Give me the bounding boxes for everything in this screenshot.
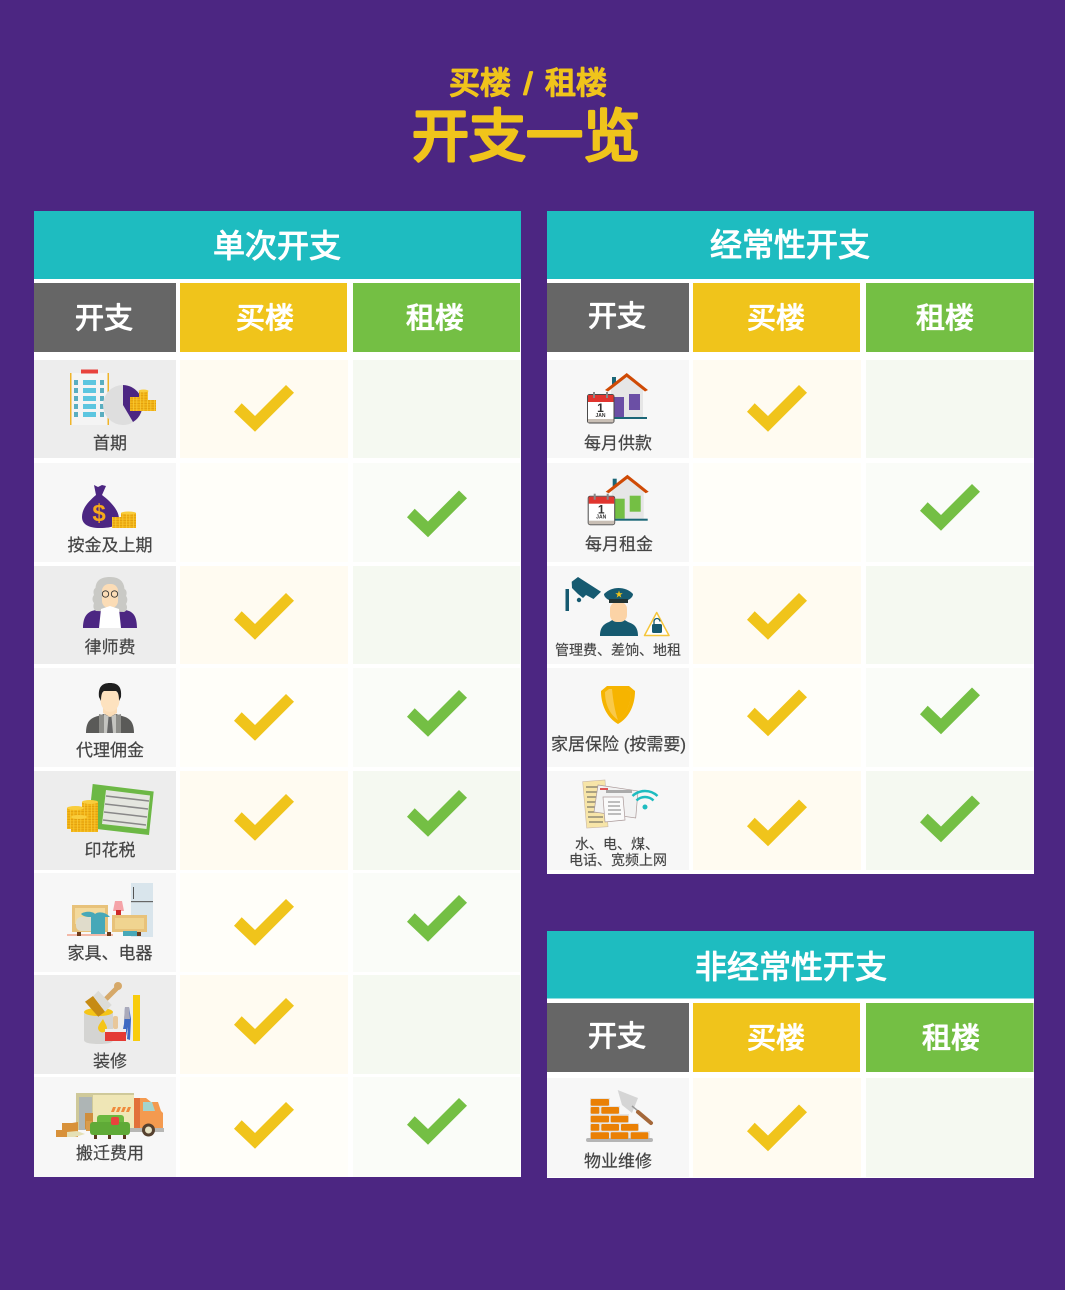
- tick: [234, 998, 294, 1045]
- tick: [920, 484, 980, 531]
- icon: money bag: [82, 485, 136, 528]
- subtitle: 买楼: [449, 66, 511, 101]
- icon: house and calendar: JAN: [596, 515, 607, 521]
- row: furniture: [34, 873, 520, 972]
- label: 管理费、差饷、地租: [555, 642, 681, 658]
- icon: guard, camera and lock: [566, 577, 669, 636]
- tick: [407, 1098, 467, 1145]
- row: moving costs: [34, 1077, 520, 1177]
- column headers: [34, 283, 520, 352]
- tick: [234, 385, 294, 432]
- tick: [234, 1102, 294, 1149]
- icon: stamp document and coins: [67, 784, 154, 835]
- tick: [747, 800, 807, 846]
- tick: [407, 895, 467, 942]
- panel: recurring costs: [547, 211, 1034, 874]
- heading: one-off costs: [34, 211, 521, 279]
- heading: non-recurring costs: [547, 931, 1034, 998]
- label: 水、电、煤、: [575, 836, 659, 852]
- row: management fee: [547, 566, 1034, 664]
- tick: [747, 690, 807, 736]
- label: 家居保险 (按需要): [551, 735, 686, 754]
- heading: one-off costs: 单次开支: [213, 228, 341, 264]
- panel: one-off costs: [34, 211, 521, 1177]
- tick: [920, 688, 980, 734]
- tick: [747, 593, 807, 640]
- label: 电话、宽频上网: [569, 852, 667, 868]
- label: 每月租金: [585, 535, 653, 554]
- icon: house and calendar: 1: [597, 401, 604, 415]
- row: deposit: [34, 463, 520, 562]
- icon: building and pie: [70, 370, 156, 425]
- label: 搬迁费用: [76, 1144, 144, 1163]
- icon: house and calendar: [588, 373, 648, 423]
- icon: paint and tools: [84, 982, 140, 1044]
- label: 按金及上期: [68, 536, 152, 555]
- panel: non-recurring costs: [547, 931, 1034, 1178]
- label: 首期: [93, 434, 127, 453]
- icon: bricks and trowel: [586, 1090, 653, 1142]
- column headers: 买楼: [747, 302, 805, 335]
- tick: [747, 385, 807, 432]
- icon: bills and wifi: [583, 780, 658, 828]
- column headers: [547, 283, 1034, 352]
- heading: recurring costs: 经常性开支: [710, 227, 870, 263]
- tick: [407, 490, 467, 537]
- row: stamp duty: [34, 771, 520, 870]
- icon: house and calendar: 1: [598, 503, 605, 517]
- heading: non-recurring costs: 非经常性开支: [695, 949, 887, 985]
- tick: [407, 690, 467, 737]
- label: 家具、电器: [68, 944, 152, 963]
- tick: [407, 790, 467, 837]
- row: monthly mortgage: [547, 360, 1034, 458]
- column headers: 买楼: [747, 1022, 805, 1055]
- row: utilities: [547, 771, 1034, 870]
- icon: judge: [83, 577, 137, 628]
- row: property repairs: [547, 1078, 1034, 1177]
- column headers: 租楼: [922, 1022, 980, 1055]
- label: 代理佣金: [76, 741, 144, 760]
- tick: [234, 794, 294, 841]
- column headers: 开支: [75, 302, 133, 335]
- title: [412, 66, 640, 169]
- row: legal fee: [34, 566, 520, 664]
- label: [569, 836, 667, 868]
- subtitle: [449, 66, 607, 101]
- tick: [234, 899, 294, 946]
- column headers: 租楼: [406, 302, 464, 335]
- column headers: [547, 1003, 1034, 1072]
- column headers: 买楼: [236, 302, 294, 335]
- column headers: 开支: [588, 300, 646, 333]
- row: monthly rent: [547, 463, 1034, 562]
- icon: agent: [86, 683, 134, 733]
- column headers: 租楼: [916, 302, 974, 335]
- icon: moving truck: [56, 1093, 164, 1139]
- row: home insurance: [547, 668, 1034, 767]
- icon: furniture: [67, 883, 153, 937]
- tick: [234, 593, 294, 640]
- tick: [920, 796, 980, 842]
- icon: house and calendar: JAN: [595, 413, 606, 419]
- row: agent fee: [34, 668, 520, 767]
- subtitle: /: [524, 66, 533, 101]
- main title: 开支一览: [412, 105, 640, 169]
- row: down payment: [34, 360, 520, 458]
- column headers: 开支: [588, 1020, 646, 1053]
- tick: [747, 1104, 807, 1151]
- row: renovation: [34, 975, 520, 1074]
- heading: recurring costs: [547, 211, 1034, 279]
- label: 印花税: [84, 841, 136, 860]
- icon: guard, camera and lock: ★: [615, 590, 623, 599]
- icon: money bag: $: [92, 500, 106, 527]
- label: 每月供款: [584, 434, 652, 453]
- label: 律师费: [84, 638, 136, 657]
- icon: shield: [601, 686, 635, 724]
- subtitle: 租楼: [545, 66, 607, 101]
- label: 装修: [93, 1052, 127, 1071]
- tick: [234, 694, 294, 741]
- icon: house and calendar: [588, 475, 649, 525]
- label: 物业维修: [584, 1152, 652, 1171]
